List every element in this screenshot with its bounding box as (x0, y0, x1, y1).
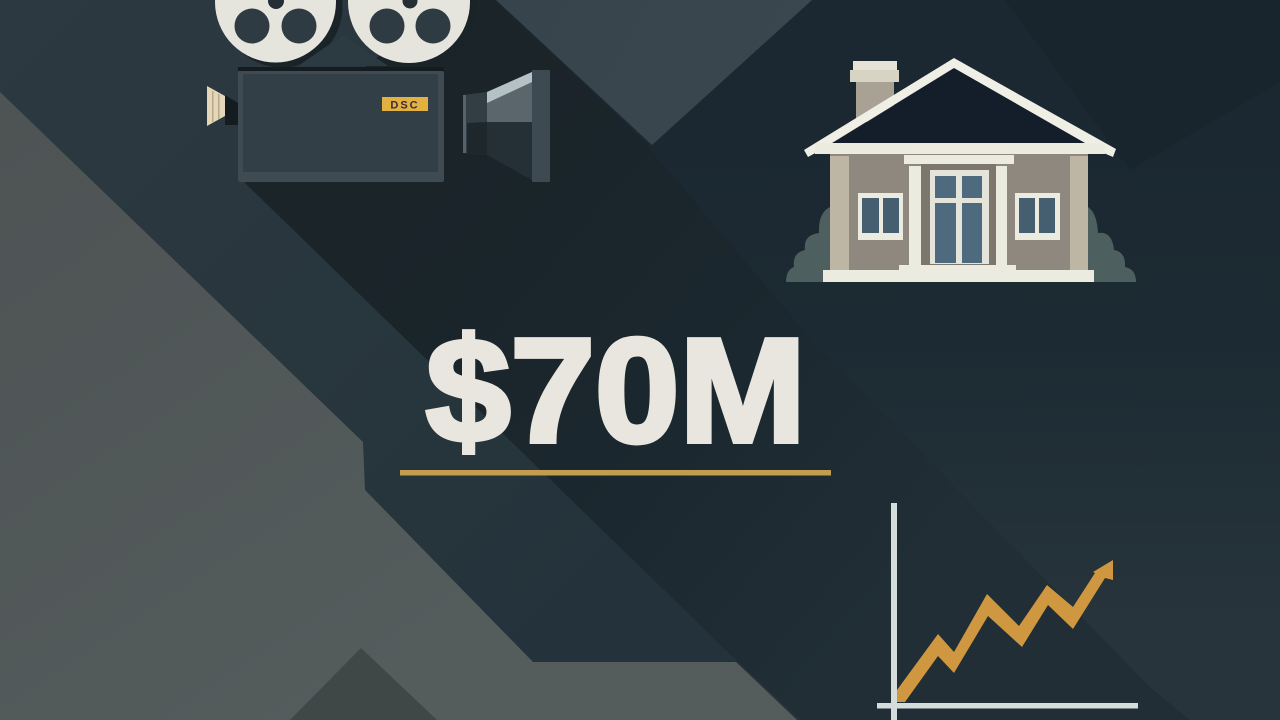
camera body (238, 67, 444, 182)
lens (463, 70, 550, 182)
chimney (850, 61, 899, 122)
rising arrow (897, 560, 1113, 702)
foundation (823, 265, 1094, 282)
camera label (382, 97, 428, 112)
walls (830, 154, 1088, 270)
porch (904, 155, 1014, 266)
rear knob (207, 86, 238, 126)
icon: house (786, 58, 1136, 282)
headline figure: $70M (426, 308, 806, 474)
reel shadows (222, 0, 477, 68)
camera label: DSC (390, 100, 420, 112)
chart axes (877, 503, 1138, 720)
icon: film camera (207, 0, 550, 182)
bushes (786, 207, 1136, 282)
gold underline (400, 470, 831, 476)
roof (804, 58, 1116, 157)
film reel left (215, 0, 336, 62)
film reel right (348, 0, 470, 63)
door (930, 170, 989, 264)
window right (1015, 193, 1060, 240)
camera mount (298, 35, 388, 66)
window left (858, 193, 903, 240)
line chart (877, 503, 1138, 720)
